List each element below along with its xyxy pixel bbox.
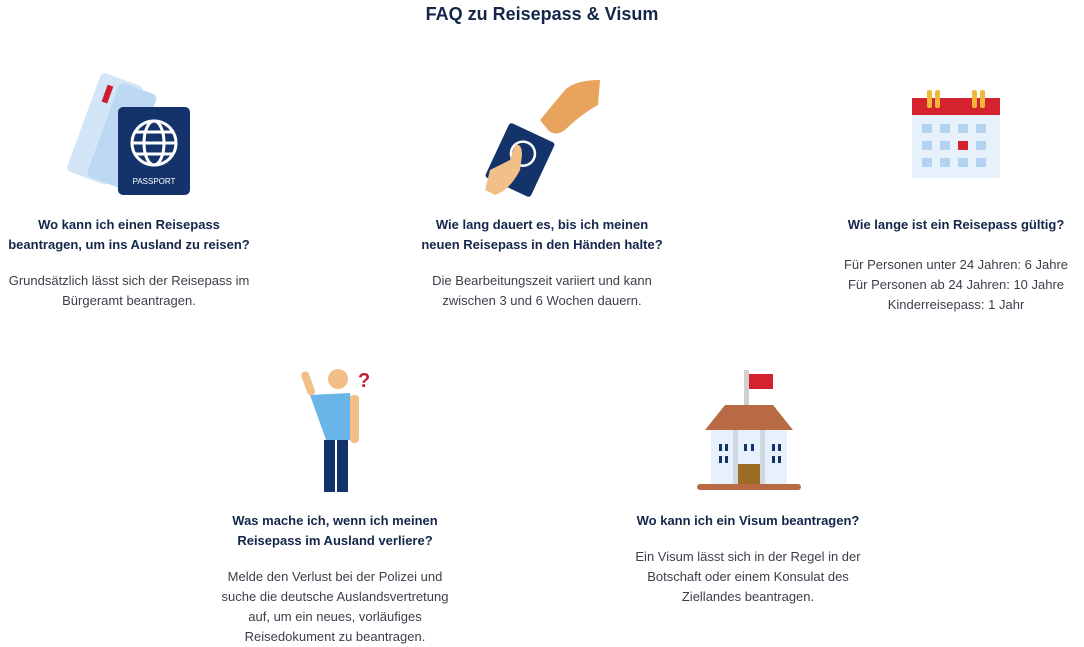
text: question 1 (8, 217, 250, 308)
text: question 5: Ein Visum lässt sich in der Regel in der (635, 549, 861, 564)
text: question 5 (635, 513, 861, 604)
text: question 4 (222, 513, 448, 644)
text: question 4: Was mache ich, wenn ich meinen (232, 513, 438, 528)
text: question 3: Für Personen unter 24 Jahren: 6 Jahre (844, 257, 1068, 272)
text: question 1: Wo kann ich einen Reisepass (38, 217, 220, 232)
text: question 4: auf, um ein neues, vorläufiges (248, 609, 422, 624)
text: question 3 (844, 217, 1068, 312)
text: question 1: beantragen, um ins Ausland zu reisen? (8, 237, 250, 252)
icon: calendar (912, 90, 1000, 178)
text: question 5: Botschaft oder einem Konsulat des (647, 569, 849, 584)
icon: passport and tickets (67, 73, 190, 195)
text: question 5: Ziellandes beantragen. (682, 589, 814, 604)
text: question 4: Reisepass im Ausland verliere? (237, 533, 433, 548)
text: question 2: Die Bearbeitungszeit variiert und kann (432, 273, 652, 288)
icon: confused person (301, 369, 370, 492)
icon: hand over passport (485, 80, 600, 197)
text: question 2: zwischen 3 und 6 Wochen dauern. (442, 293, 642, 308)
text: question 2 (421, 217, 663, 308)
text: question 1: Bürgeramt beantragen. (62, 293, 196, 308)
text: question 3: Wie lange ist ein Reisepass gültig? (848, 217, 1064, 232)
text: question 2: Wie lang dauert es, bis ich meinen (436, 217, 648, 232)
text: question 5: Wo kann ich ein Visum beantragen? (637, 513, 859, 528)
text: question 3: Kinderreisepass: 1 Jahr (888, 297, 1024, 312)
text: question 4: Reisedokument zu beantragen. (245, 629, 425, 644)
icon: confused person: ? (358, 370, 370, 392)
text: question 4: suche die deutsche Auslandsvertretung (222, 589, 448, 604)
text: question 1: Grundsätzlich lässt sich der Reisepass im (9, 273, 249, 288)
text: question 3: Für Personen ab 24 Jahren: 10 Jahre (848, 277, 1064, 292)
title: FAQ zu Reisepass & Visum (426, 4, 658, 24)
text: question 2: neuen Reisepass in den Händen halte? (421, 237, 663, 252)
icon: embassy building (697, 370, 801, 490)
icon: passport and tickets: PASSPORT (133, 177, 176, 186)
text: question 4: Melde den Verlust bei der Polizei und (228, 569, 442, 584)
